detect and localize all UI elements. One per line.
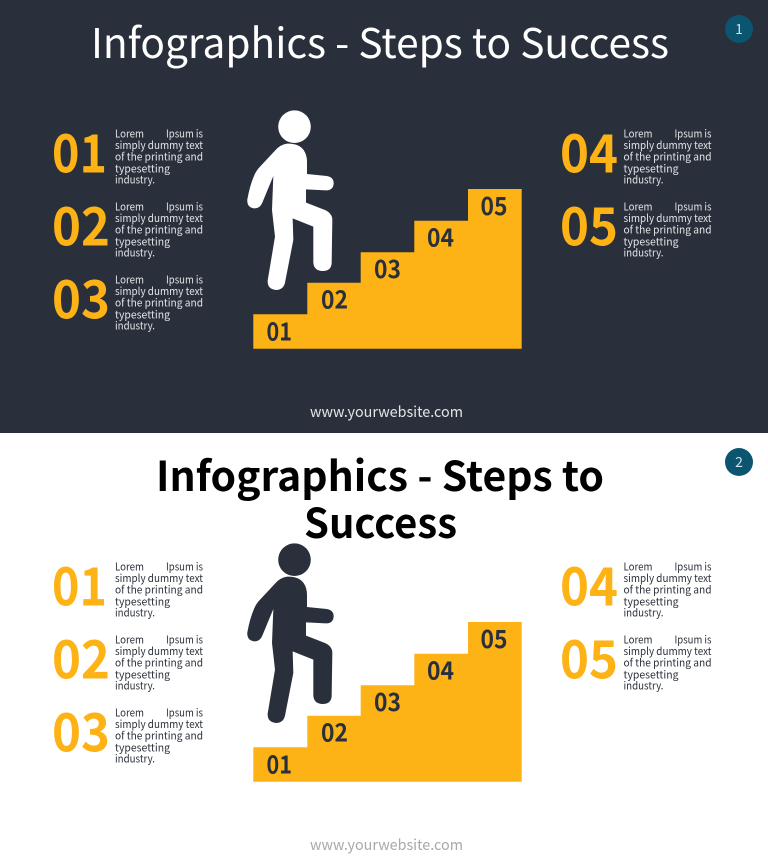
- step 03 text block: [52, 692, 203, 768]
- step 03 text block: simply dummy text: [115, 717, 203, 732]
- stair label 01: 01: [266, 746, 292, 782]
- step 02 text block: of the printing and: [115, 222, 203, 238]
- step 05 text block: simply dummy text: [624, 644, 712, 659]
- step 04 text block: Ipsum is: [674, 126, 712, 142]
- step 04 text block: Lorem: [624, 126, 652, 142]
- step 02 text block: simply dummy text: [115, 644, 203, 659]
- step 05 text block: simply dummy text: [624, 211, 712, 226]
- stair label 04: 04: [427, 652, 454, 688]
- stair label 05: 05: [480, 620, 508, 656]
- step 04 text block: 04: [560, 546, 618, 622]
- staircase chart: [253, 187, 522, 349]
- step 04 text block: typesetting: [624, 162, 679, 176]
- step 05 text block: [560, 618, 712, 694]
- step 01 text block: [52, 546, 203, 622]
- step 02 text block: typesetting: [115, 234, 170, 250]
- step 04 text block: industry.: [624, 172, 664, 188]
- step 02 text block: 02: [52, 186, 110, 262]
- title: Infographics - Steps to: [156, 443, 604, 503]
- step 01 text block: industry.: [115, 606, 155, 620]
- step 05 text block: 05: [560, 618, 618, 694]
- step 03 text block: typesetting: [115, 308, 170, 322]
- step 05 text block: industry.: [624, 678, 664, 694]
- stair label 01: 01: [266, 313, 292, 349]
- step 01 text block: Lorem: [115, 126, 144, 142]
- step 03 text block: typesetting: [115, 740, 170, 756]
- step 01 text block: simply dummy text: [115, 138, 203, 153]
- title: Infographics - Steps to Success: [91, 10, 669, 70]
- step 03 text block: of the printing and: [115, 296, 203, 310]
- stair label 03: 03: [374, 683, 401, 719]
- step 01 text block: Lorem: [115, 560, 144, 574]
- title: [156, 443, 604, 550]
- step 02 text block: [52, 186, 203, 262]
- stair label 04: 04: [427, 219, 454, 255]
- step 03 text block: industry.: [115, 752, 155, 766]
- stair label 02: 02: [321, 280, 348, 316]
- icon: climbing person: [247, 543, 334, 723]
- title: Success: [304, 490, 457, 550]
- step 02 text block: Lorem: [115, 632, 144, 648]
- step 04 text block: simply dummy text: [624, 571, 712, 586]
- stair label 03: 03: [374, 250, 401, 286]
- step 04 text block: of the printing and: [624, 150, 712, 164]
- footer website: www.yourwebsite.com: [310, 401, 463, 422]
- footer website: www.yourwebsite.com: [310, 834, 463, 855]
- slide number badge: 1: [735, 19, 743, 39]
- step 01 text block: typesetting: [115, 594, 170, 610]
- panel: dark slide: [0, 0, 768, 433]
- slide number badge: [725, 448, 753, 476]
- step 03 text block: Lorem: [115, 272, 144, 288]
- step 02 text block: industry.: [115, 678, 155, 694]
- step 03 text block: simply dummy text: [115, 284, 203, 299]
- step 05 text block: industry.: [624, 246, 664, 260]
- step 02 text block: typesetting: [115, 668, 170, 682]
- step 02 text block: [52, 618, 203, 694]
- stair label 02: 02: [321, 714, 348, 750]
- step 05 text block: Lorem: [624, 200, 652, 214]
- step 02 text block: Ipsum is: [166, 200, 203, 214]
- step 05 text block: typesetting: [624, 234, 679, 250]
- step 01 text block: 01: [52, 112, 107, 188]
- step 04 text block: Lorem: [624, 560, 652, 574]
- step 02 text block: industry.: [115, 246, 155, 260]
- slide number badge: 2: [735, 452, 743, 472]
- step 03 text block: industry.: [115, 318, 155, 334]
- step 01 text block: [52, 112, 203, 188]
- step 05 text block: Ipsum is: [674, 200, 712, 214]
- step 02 text block: of the printing and: [115, 656, 203, 670]
- panel: light slide: [0, 433, 768, 866]
- staircase chart: [253, 620, 522, 782]
- stair label 05: 05: [480, 187, 508, 223]
- step 04 text block: Ipsum is: [674, 560, 712, 574]
- step 01 text block: Ipsum is: [166, 560, 203, 574]
- step 05 text block: of the printing and: [624, 656, 712, 670]
- step 03 text block: Lorem: [115, 706, 144, 720]
- step 03 text block: Ipsum is: [166, 706, 203, 720]
- step 01 text block: typesetting: [115, 162, 170, 176]
- step 04 text block: [560, 546, 712, 622]
- step 01 text block: industry.: [115, 172, 155, 188]
- step 04 text block: of the printing and: [624, 582, 712, 598]
- step 04 text block: industry.: [624, 606, 664, 620]
- step 05 text block: 05: [560, 186, 618, 262]
- step 05 text block: of the printing and: [624, 222, 712, 238]
- step 03 text block: Ipsum is: [166, 272, 203, 288]
- step 01 text block: of the printing and: [115, 150, 203, 164]
- icon: climbing person: [247, 110, 334, 290]
- slide number badge: [725, 15, 753, 43]
- step 05 text block: Ipsum is: [674, 632, 712, 648]
- step 04 text block: [560, 112, 712, 188]
- step 01 text block: Ipsum is: [166, 126, 203, 142]
- step 02 text block: simply dummy text: [115, 211, 203, 226]
- step 05 text block: typesetting: [624, 668, 679, 682]
- step 03 text block: 03: [52, 692, 110, 768]
- step 04 text block: simply dummy text: [624, 138, 712, 153]
- step 03 text block: [52, 258, 203, 334]
- step 01 text block: simply dummy text: [115, 571, 203, 586]
- step 05 text block: Lorem: [624, 632, 652, 648]
- step 04 text block: 04: [560, 112, 618, 188]
- step 02 text block: 02: [52, 618, 110, 694]
- step 03 text block: of the printing and: [115, 728, 203, 744]
- step 01 text block: of the printing and: [115, 582, 203, 598]
- step 02 text block: Ipsum is: [166, 632, 203, 648]
- step 05 text block: [560, 186, 712, 262]
- step 02 text block: Lorem: [115, 200, 144, 214]
- step 04 text block: typesetting: [624, 594, 679, 610]
- step 01 text block: 01: [52, 546, 107, 622]
- step 03 text block: 03: [52, 258, 110, 334]
